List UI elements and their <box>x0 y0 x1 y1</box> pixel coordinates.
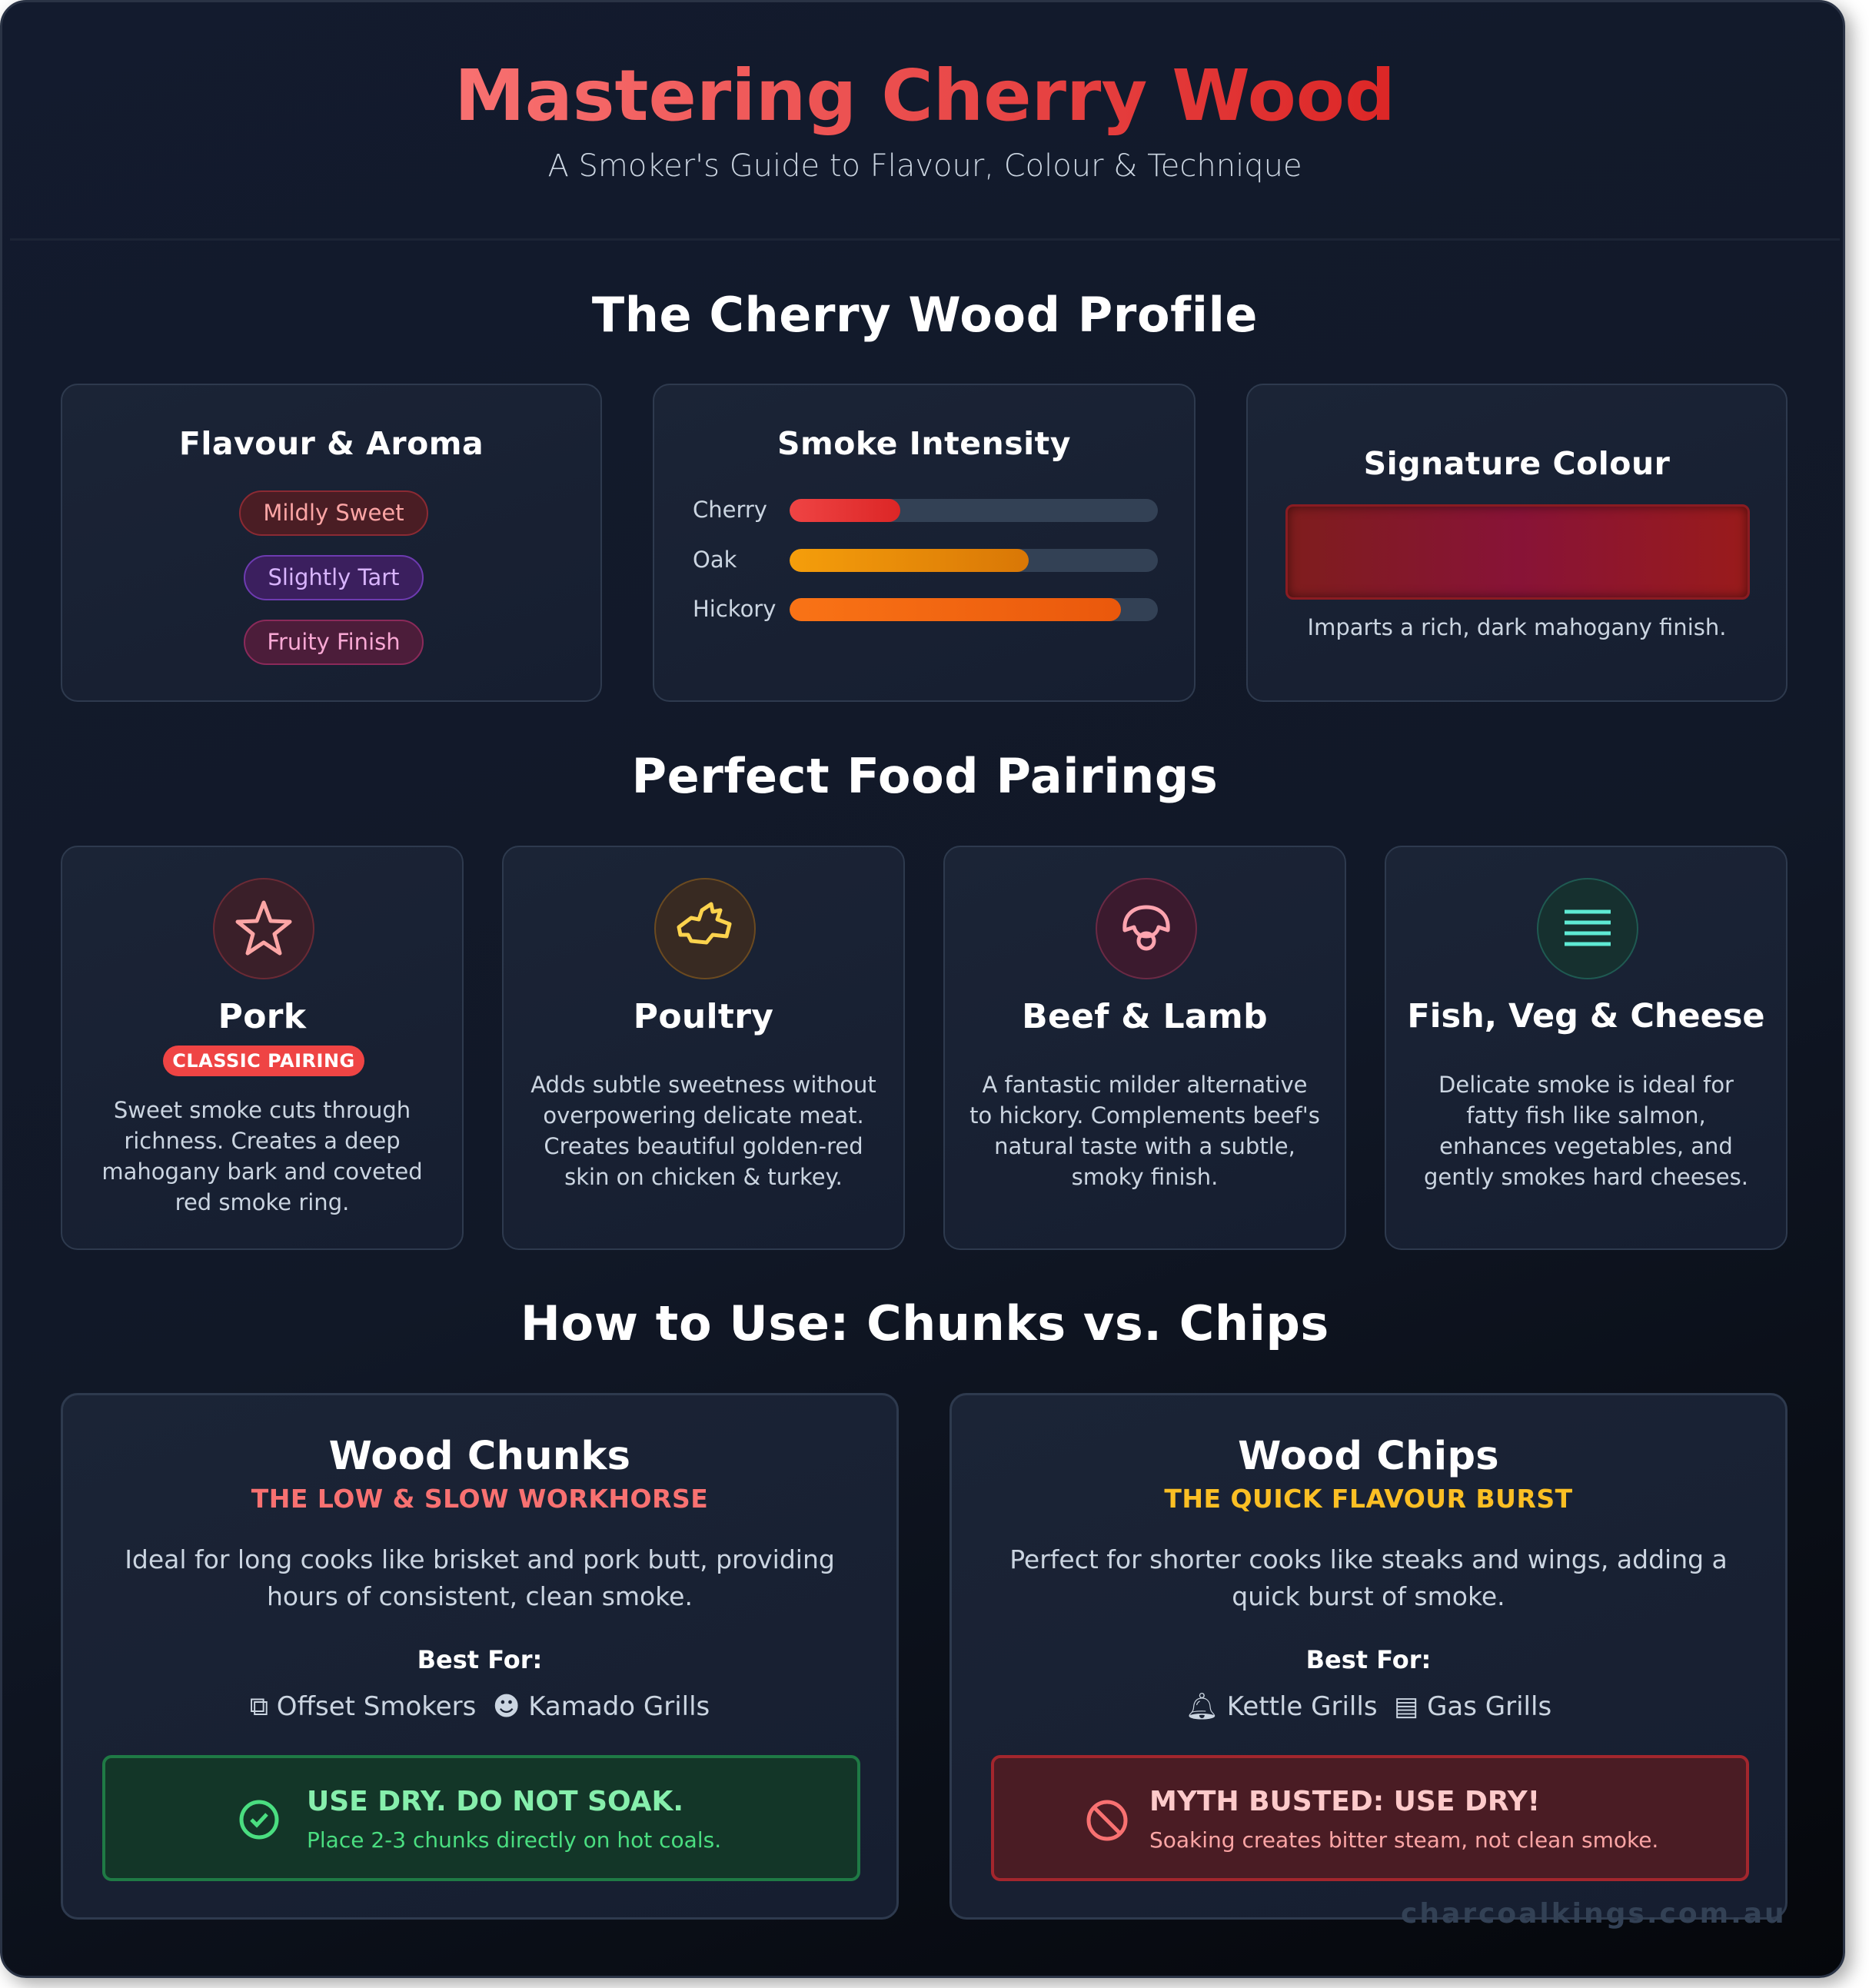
panel: fish veg cheese: Fish, Veg & Cheese <box>1407 997 1765 1036</box>
callout: myth busted: Soaking creates bitter steam, not clean smoke. <box>1149 1827 1658 1853</box>
watermark: charcoalkings.com.au <box>1401 1898 1787 1930</box>
panel: wood chunks <box>61 1393 899 1920</box>
panel: smoke intensity: Smoke Intensity <box>777 425 1071 462</box>
bar: oak <box>693 547 1158 573</box>
panel: fish veg cheese <box>1385 846 1788 1250</box>
panel: smoke intensity: Hickory <box>693 596 776 622</box>
badge <box>163 1046 364 1076</box>
icon: lines <box>1537 878 1638 979</box>
panel: poultry <box>502 846 905 1250</box>
heading: pairings: Perfect Food Pairings <box>632 748 1218 804</box>
panel: beef & lamb: A fantastic milder alternative to hickory. Complements beef's natural taste with a subtle, smoky finish. <box>969 1072 1320 1190</box>
badge: CLASSIC PAIRING <box>172 1050 355 1072</box>
heading: profile: The Cherry Wood Profile <box>592 287 1258 343</box>
subtitle: A Smoker's Guide to Flavour, Colour & Technique <box>547 148 1302 184</box>
panel: beef & lamb: Beef & Lamb <box>1022 997 1268 1036</box>
panel: poultry: Poultry <box>634 997 773 1036</box>
panel: beef & lamb <box>943 846 1346 1250</box>
icon: star <box>213 878 314 979</box>
panel: poultry: Adds subtle sweetness without overpowering delicate meat. Creates beautiful golden-red skin on chicken & turkey. <box>530 1072 876 1190</box>
panel: wood chips: Best For: <box>1306 1645 1431 1674</box>
panel: flavour & aroma <box>61 384 602 702</box>
panel: pork: Pork <box>218 997 306 1036</box>
pill: slightly tart <box>244 555 424 600</box>
panel: wood chips: Perfect for shorter cooks like steaks and wings, adding a quick burst of smoke. <box>1009 1544 1728 1611</box>
colour swatch <box>1285 504 1750 600</box>
pill: mildly sweet <box>239 490 428 536</box>
panel: smoke intensity: Oak <box>693 547 737 573</box>
pill: fruity finish: Fruity Finish <box>267 629 401 655</box>
pill: fruity finish <box>244 620 424 665</box>
callout: myth busted: MYTH BUSTED: USE DRY! <box>1149 1786 1540 1817</box>
best for list: ⧉ Offset Smokers ☻ Kamado Grills <box>250 1691 710 1722</box>
panel: wood chunks: THE LOW & SLOW WORKHORSE <box>251 1484 708 1514</box>
callout: use dry: Place 2-3 chunks directly on hot coals. <box>307 1827 721 1853</box>
callout: use dry: USE DRY. DO NOT SOAK. <box>307 1786 683 1817</box>
bar: hickory <box>693 596 1158 622</box>
heading: how to use: How to Use: Chunks vs. Chips <box>520 1295 1329 1351</box>
pill: slightly tart: Slightly Tart <box>268 564 400 590</box>
panel: wood chips <box>949 1393 1788 1920</box>
panel: pork <box>61 846 464 1250</box>
panel: smoke intensity: Cherry <box>693 497 767 523</box>
panel: wood chunks: Best For: <box>417 1645 542 1674</box>
panel: signature colour: Signature Colour <box>1364 445 1670 482</box>
panel: fish veg cheese: Delicate smoke is ideal for fatty fish like salmon, enhances vegetables, and gently smokes hard cheeses. <box>1424 1072 1748 1190</box>
callout: myth busted <box>991 1755 1749 1881</box>
callout: use dry <box>102 1755 860 1881</box>
panel: wood chunks: Ideal for long cooks like brisket and pork butt, providing hours of consistent, clean smoke. <box>125 1544 835 1611</box>
panel: signature colour: Imparts a rich, dark mahogany finish. <box>1308 614 1726 640</box>
title: Mastering Cherry Wood <box>454 55 1395 137</box>
panel: flavour & aroma: Flavour & Aroma <box>179 425 484 462</box>
pill: mildly sweet: Mildly Sweet <box>263 500 404 526</box>
panel: signature colour <box>1246 384 1788 702</box>
panel: pork: Sweet smoke cuts through richness. Creates a deep mahogany bark and coveted red smoke ring. <box>101 1097 423 1215</box>
icon: poultry <box>654 878 756 979</box>
panel: smoke intensity <box>653 384 1196 702</box>
panel: wood chips: THE QUICK FLAVOUR BURST <box>1164 1484 1573 1514</box>
panel: wood chunks: Wood Chunks <box>329 1434 630 1479</box>
panel: wood chips: Wood Chips <box>1238 1434 1499 1479</box>
icon: mushroom <box>1096 878 1197 979</box>
best for list: 🔔︎ Kettle Grills ▤ Gas Grills <box>1186 1691 1551 1722</box>
bar: cherry <box>693 497 1158 523</box>
